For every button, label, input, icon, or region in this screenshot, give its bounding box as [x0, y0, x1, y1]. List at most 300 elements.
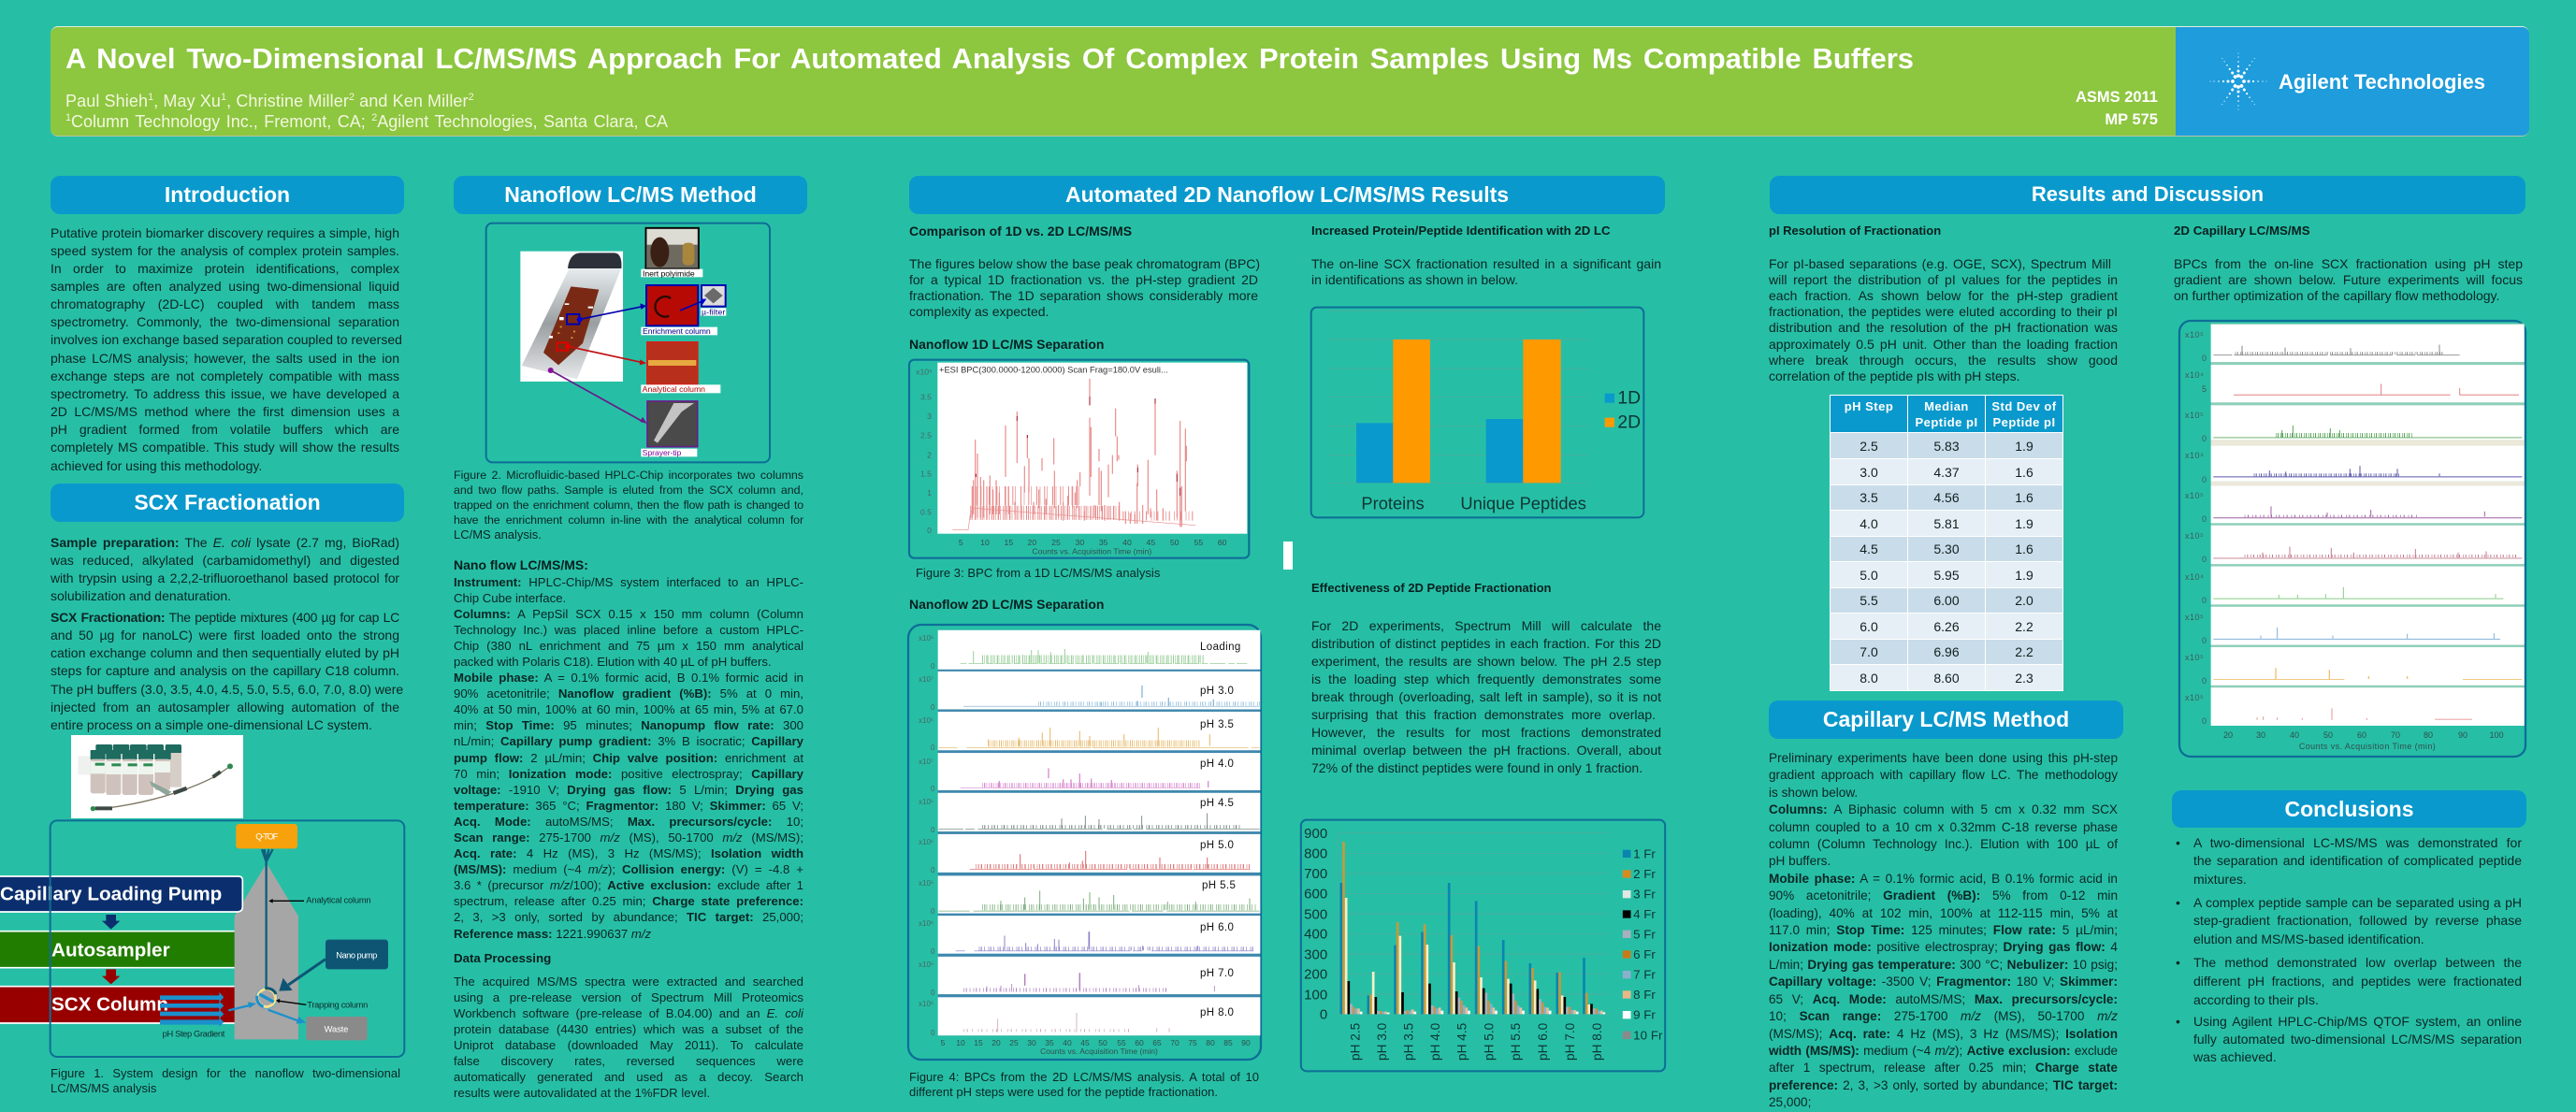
text: nano flow method: Instrument: HPLC-Chip/MS system interfaced to an HPLC-: [454, 574, 803, 589]
y axis labels: 0: [931, 989, 935, 997]
y axis labels: 400: [1304, 927, 1327, 943]
y axis labels: x10⁷: [919, 758, 933, 766]
legend: 5 Fr: [1633, 927, 1656, 941]
text: data processing: Workbench software (pre-release of B.04.00) and an E. coli: [454, 1006, 803, 1020]
y axis labels: 0.5: [920, 507, 932, 516]
x axis labels: pH 5.0: [1482, 1022, 1497, 1061]
heading: Automated 2D Nanoflow LC/MS/MS Results: Automated 2D Nanoflow LC/MS/MS Results: [1065, 182, 1509, 207]
table: pH step vs median peptide pI: 4.0: [1860, 516, 1878, 531]
y axis labels: 0: [931, 826, 935, 834]
text: effectiveness: 72% of the distinct peptides were found in only 1 fraction.: [1311, 760, 1643, 775]
x axis labels: [1349, 1022, 1604, 1061]
fraction labels: pH 4.5: [1200, 798, 1234, 809]
photo: enrichment column: [641, 285, 717, 336]
table: pH step vs median peptide pI: 8.60: [1933, 670, 1960, 685]
text: capillary method: (MS/MS); Acq. rate: 4 Hz (MS), 3 Hz (MS/MS); Isolation: [1769, 1027, 2118, 1040]
text: capillary method: width (MS/MS): medium (~4 m/z); Active exclusion: exclude: [1769, 1044, 2118, 1058]
x axis labels: 20: [2223, 730, 2233, 740]
x axis labels: 40: [1122, 538, 1132, 547]
table: pH step vs median peptide pI: [1830, 395, 2063, 691]
category labels: Proteins: [1361, 494, 1425, 513]
figure 2: HPLC-Chip: [485, 223, 771, 464]
y axis labels: x10⁵: [2185, 613, 2204, 622]
text: capillary method: (loading), 40% at 102 min, 100% at 112-115 min, 5% at: [1769, 906, 2118, 920]
x axis labels: 60: [1135, 1038, 1144, 1047]
heading: nanoflow 2D separation: Nanoflow 2D LC/MS Separation: [909, 597, 1104, 612]
fraction labels: Loading: [1200, 642, 1241, 653]
heading: comparison of 1D vs 2D: Comparison of 1D vs. 2D LC/MS/MS: [909, 224, 1132, 238]
y axis labels: 0: [2202, 676, 2207, 686]
conclusion bullet 4: •: [2176, 1014, 2180, 1029]
x axis labels: 65: [1152, 1038, 1162, 1047]
x axis labels: 85: [1223, 1038, 1233, 1047]
x axis labels: 60: [2357, 730, 2366, 740]
photo: SCX cartridges and column: [71, 735, 243, 818]
x axis labels: pH 4.0: [1428, 1022, 1442, 1061]
table: pH step vs median peptide pI: Std Dev of: [1991, 399, 2057, 413]
photo: µ-filter: µ-filter: [702, 307, 725, 316]
text: capillary method: gradient approach with capillary flow LC. The methodology: [1769, 768, 2118, 782]
conclusion bullet 1: A two-dimensional LC-MS/MS was demonstrated for: [2193, 835, 2522, 850]
caption: figure 1: LC/MS/MS analysis: [51, 1081, 156, 1095]
conference and poster number: MP 575: [2105, 111, 2158, 128]
table: pH step vs median peptide pI: 1.9: [2015, 438, 2033, 453]
table: pH step vs median peptide pI: pH Step: [1845, 399, 1893, 413]
heading: increased identification: Increased Protein/Peptide Identification with 2D LC: [1311, 224, 1610, 238]
fraction labels: pH 5.0: [1200, 840, 1234, 851]
y axis labels: 2: [927, 450, 932, 459]
text: nano flow method: 70 min; Ionization mode: positive electrospray; Capillary: [454, 767, 803, 781]
y axis labels: 5: [2202, 384, 2207, 394]
x axis labels: pH 3.0: [1375, 1022, 1389, 1061]
label: analytical column: Analytical column: [306, 896, 371, 905]
heading: Results and Discussion: [1770, 176, 2525, 214]
flow arrows to valve and waste: [228, 1005, 297, 1020]
x axis labels: 35: [1099, 538, 1108, 547]
legend: 1 Fr: [1633, 846, 1656, 860]
x axis labels: pH 7.0: [1563, 1022, 1577, 1061]
x axis labels: pH 2.5: [1349, 1022, 1362, 1061]
heading: SCX Fractionation: [51, 484, 404, 522]
text: capillary method: 117.0 min; Stop Time: 125 minutes; Flow rate: 5 µL/min;: [1769, 923, 2118, 937]
icon: Agilent spark logo: [2209, 52, 2267, 110]
x axis labels: Counts vs. Acquisition Time (min): [1040, 1047, 1158, 1056]
table: pH step vs median peptide pI: 2.3: [2015, 670, 2033, 685]
legend: 3 Fr: [1633, 888, 1656, 902]
y axis labels: 0: [2202, 434, 2207, 443]
text: nano flow method: Scan range: 275-1700 m/z (MS), 50-1700 m/z (MS/MS);: [454, 830, 803, 845]
fraction labels: pH 3.5: [1200, 719, 1234, 730]
caption: figure 1: [51, 1066, 400, 1095]
y axis labels: [1304, 826, 1327, 1023]
table: pH step vs median peptide pI: 1.6: [2015, 464, 2033, 479]
table: pH step vs median peptide pI: 2.5: [1860, 438, 1878, 453]
y axis labels: 700: [1304, 866, 1327, 882]
text: introduction: 2D LC/MS/MS method where the first dimension uses a: [51, 404, 399, 419]
table: pH step vs median peptide pI: 5.95: [1933, 567, 1960, 582]
pH step gradient arrows: [160, 992, 224, 1027]
y axis labels: x10⁵: [2185, 491, 2204, 500]
text: SCX sample preparation: Sample preparation: The E. coli lysate (2.7 mg, BioRad): [51, 535, 399, 550]
text: comparison: for a typical 1D fractionation vs. the pH-step gradient 2D: [909, 272, 1258, 287]
conclusion bullet 4: fully automated two-dimensional LC/MS/MS separation: [2193, 1032, 2522, 1047]
conclusion bullet 1: the separation and identification of complicated peptide: [2193, 853, 2522, 868]
text: SCX fractionation: steps for capture and analysis on the capillary C18 column.: [51, 663, 399, 678]
legend: 2D: [1617, 413, 1641, 433]
header banner: [51, 26, 2529, 137]
analytical column with spray fan: [262, 849, 273, 988]
table: pH step vs median peptide pI: 6.26: [1933, 619, 1960, 634]
conclusion bullet 3: different pH fractions, and peptides were fractionated: [2193, 974, 2522, 989]
table: pH step vs median peptide pI: 4.56: [1933, 490, 1960, 505]
text: data processing: [454, 975, 804, 1100]
plot area: [937, 363, 1247, 534]
photo: enrichment column: Enrichment column: [643, 326, 711, 336]
text: pI resolution: fractionation, the peptides were eluted according to their pI: [1769, 304, 2118, 319]
y axis labels: x10⁴: [2185, 572, 2204, 582]
conclusion bullet 3: according to their pIs.: [2193, 992, 2319, 1007]
text: nano flow method: (MS/MS): medium (~4 m/z); Collision energy: (V) = -4.8 +: [454, 862, 803, 876]
x axis labels: 15: [1005, 538, 1013, 547]
text: pI resolution: correlation of the peptide pIs with pH steps.: [1769, 368, 2019, 383]
autosampler box: [0, 931, 235, 968]
text: data processing: Uniprot database (downloaded May 2011). To calculate: [454, 1038, 803, 1052]
capillary loading pump box: [0, 876, 242, 912]
heading: Conclusions: [2172, 790, 2526, 828]
x axis labels: [941, 1038, 1251, 1056]
text: nano flow method: nL/min; Capillary pump gradient: 3% B isocratic; Capillary: [454, 734, 803, 748]
legend: 8 Fr: [1633, 988, 1656, 1002]
text: capillary method: is shown below.: [1769, 786, 1858, 800]
legend: 9 Fr: [1633, 1008, 1656, 1022]
y axis labels: 300: [1304, 946, 1327, 962]
text: introduction: [51, 224, 402, 473]
fraction labels: pH 7.0: [1200, 968, 1234, 979]
table: pH step vs median peptide pI: Median: [1924, 399, 1969, 413]
text: effectiveness: break through (overloading, salt left in sample), so it is not: [1311, 689, 1661, 704]
category labels: [1361, 494, 1586, 513]
text: introduction: phase LC/MS analysis; however, the salts used in the ion: [51, 351, 399, 366]
caption: figure 1: Figure 1. System design for the nanoflow two-dimensional: [51, 1066, 400, 1080]
heading: Automated 2D Nanoflow LC/MS/MS Results: [909, 176, 1665, 214]
x axis labels: 5: [959, 538, 963, 547]
text: capillary method: column coupled to a 10 cm x 0.32mm C-18 reverse phase: [1769, 820, 2118, 834]
x axis labels: 25: [1009, 1038, 1019, 1047]
table: pH step vs median peptide pI: Peptide pI: [1915, 415, 1978, 429]
text: 2D capillary: gradient are shown below. Future experiments will focus: [2174, 272, 2523, 287]
authors and affiliations: Paul Shieh1, May Xu1, Christine Miller2 and Ken Miller2: [65, 92, 474, 110]
x axis labels: Counts vs. Acquisition Time (min): [1032, 547, 1151, 556]
x axis labels: 20: [991, 1038, 1001, 1047]
heading: Conclusions: Conclusions: [2284, 797, 2413, 821]
conclusion bullet 4: [2176, 1014, 2522, 1064]
x axis labels: 35: [1045, 1038, 1054, 1047]
table: pH step vs median peptide pI: 1.6: [2015, 490, 2033, 505]
text: nano flow method: Chip Cube interface.: [454, 591, 566, 605]
x axis labels: 80: [1206, 1038, 1215, 1047]
heading: nanoflow 1D separation: Nanoflow 1D LC/MS Separation: [909, 337, 1104, 352]
text: increased identification: The on-line SCX fractionation resulted in a significant gain: [1311, 256, 1661, 271]
text: effectiveness: is the loading step which frequently demonstrates some: [1311, 672, 1661, 686]
text: 2D capillary: [2174, 256, 2523, 303]
heading: Introduction: Introduction: [165, 182, 290, 207]
text: comparison: complexity as expected.: [909, 304, 1049, 319]
y axis labels: x10⁵: [919, 798, 933, 806]
y axis labels: x10⁶: [919, 919, 933, 928]
caption: figure 2: have the enrichment column in-line with the analytical column for: [454, 513, 803, 527]
table: pH step vs median peptide pI: 3.5: [1860, 490, 1878, 505]
waste box: Waste: [325, 1024, 348, 1033]
table: pH step vs median peptide pI: 1.9: [2015, 567, 2033, 582]
x axis labels: 70: [1170, 1038, 1179, 1047]
x axis labels: 45: [1147, 538, 1155, 547]
text: capillary method: L/min; Drying gas temperature: 300 °C; Nebulizer: 10 psig;: [1769, 958, 2118, 972]
conclusion bullet 1: •: [2176, 835, 2180, 850]
text: 2D capillary: on further optimization of the capillary flow methodology.: [2174, 288, 2499, 303]
bar series: [1341, 842, 1604, 1014]
y axis labels: 0: [2202, 514, 2207, 524]
stacked traces: [2211, 324, 2525, 726]
text: pI resolution: approximately 0.5 pH unit. Other than the loading fraction: [1769, 337, 2118, 352]
chip body: [235, 863, 298, 1039]
y axis labels: x10⁷: [919, 675, 933, 684]
text: introduction: involves ion exchange based separation coupled to reversed: [51, 332, 402, 347]
y axis labels: [919, 634, 935, 1037]
text: SCX fractionation: The pH buffers (3.0, 3.5, 4.0, 4.5, 5.0, 5.5, 6.0, 7.0, 8.0) were: [51, 682, 403, 697]
text: data processing: false discovery rates, reversed sequences were: [454, 1054, 803, 1068]
bar chart: proteins and peptides, 1D vs 2D: [1310, 307, 1644, 518]
stacked plot traces: [938, 630, 1260, 1035]
caption: figure 2: [454, 469, 803, 542]
y axis labels: 0: [931, 907, 935, 916]
y axis labels: 1: [927, 488, 932, 498]
photo: inert polyimide: [641, 228, 702, 278]
text: capillary method: Preliminary experiments have been done using this pH-step: [1769, 751, 2118, 765]
text: nano flow method: 90% acetonitrile; Nanoflow gradient (%B): 5% at 0 min,: [454, 686, 803, 700]
chromatogram trace: [952, 379, 1195, 530]
text: introduction: completely MS compatible. This study will show the results: [51, 440, 399, 455]
legend: [1623, 846, 1663, 1042]
table: pH step vs median peptide pI: 1.6: [2015, 542, 2033, 556]
y axis labels: x10⁵: [2185, 531, 2204, 541]
SCX column box: [0, 987, 235, 1023]
y axis labels: 0: [931, 703, 935, 712]
text: capillary method: pH buffers.: [1769, 854, 1831, 868]
y axis labels: 1.5: [920, 469, 932, 478]
y axis labels: 0: [931, 947, 935, 956]
x axis labels: 50: [2323, 730, 2333, 740]
text: capillary method: 25,000;: [1769, 1095, 1811, 1109]
conclusion bullet 2: step-gradient fractionation, followed by reverse phase: [2193, 913, 2522, 928]
y axis labels: 600: [1304, 887, 1327, 903]
heading: 2D capillary: 2D Capillary LC/MS/MS: [2174, 224, 2310, 238]
x axis labels: 50: [1170, 538, 1179, 547]
text: nano flow method: voltage: -1910 V; Drying gas flow: 5 L/min; Drying gas: [454, 783, 803, 797]
x axis labels: 55: [1117, 1038, 1126, 1047]
conclusion bullet 1: [2176, 835, 2522, 887]
x axis labels: 40: [1063, 1038, 1072, 1047]
y axis labels: 900: [1304, 826, 1327, 842]
figure 4: 2D base peak chromatograms: [907, 623, 1263, 1061]
table: pH step vs median peptide pI: 4.5: [1860, 542, 1878, 556]
y axis labels: x10⁵: [919, 634, 933, 643]
text: SCX fractionation: cation exchange column and then sequentially eluted by pH: [51, 645, 399, 660]
text: capillary method: [1769, 751, 2118, 1109]
y axis labels: 3.5: [920, 392, 932, 401]
text: nano flow method: 2, 3, >3 only, sorted by abundance; TIC target: 25,000;: [454, 910, 803, 924]
photo: sprayer tip: Sprayer-tip: [643, 448, 682, 457]
conclusion bullet 2: [2176, 895, 2522, 946]
text: effectiveness: distribution of distinct peptides in each fraction. For this 2D: [1311, 636, 1661, 651]
text: increased identification: in identifications as shown in below.: [1311, 272, 1518, 287]
y axis labels: 0: [2202, 636, 2207, 645]
text: SCX fractionation: entire process on a simple one-dimensional LC system.: [51, 717, 372, 732]
y axis labels: 0: [1320, 1007, 1327, 1023]
text: effectiveness: experiment, the results are shown below. The pH 2.5 step: [1311, 654, 1661, 669]
heading: Data Processing: Data Processing: [454, 951, 551, 965]
y axis labels: 0: [2202, 354, 2207, 363]
y axis labels: x10⁵: [916, 367, 933, 376]
dark peak tips: [976, 397, 1180, 496]
x axis labels: 30: [1027, 1038, 1036, 1047]
y axis labels: x10⁴: [2185, 451, 2204, 460]
legend: 2 Fr: [1633, 867, 1656, 881]
y axis labels: x10⁶: [919, 838, 933, 846]
bars: unique peptides: [1486, 339, 1561, 483]
conclusion bullet 4: Using Agilent HPLC-Chip/MS QTOF system, an online: [2193, 1014, 2522, 1029]
y axis labels: 2.5: [920, 431, 932, 440]
x axis labels: 100: [2489, 730, 2504, 740]
x axis labels: 45: [1080, 1038, 1090, 1047]
heading: Capillary LC/MS Method: [1769, 700, 2123, 739]
caption: figure 2: LC/MS analysis.: [454, 527, 542, 542]
y axis labels: 100: [1304, 987, 1327, 1003]
x axis labels: 30: [1076, 538, 1084, 547]
Q-TOF box: Q-TOF: [255, 832, 279, 842]
x axis labels: 70: [2391, 730, 2400, 740]
photo: analytical column: [641, 342, 720, 394]
bars: proteins: [1356, 339, 1430, 483]
text: nano flow method: Acq. rate: 4 Hz (MS), 3 Hz (MS/MS); Isolation width: [454, 846, 803, 860]
text: introduction: pH gradient formed from volatile buffers which are: [51, 422, 399, 437]
fraction labels: pH 8.0: [1200, 1007, 1234, 1018]
conference and poster number: [2076, 89, 2158, 128]
white marker block: [1283, 542, 1293, 570]
conclusion bullet 2: •: [2176, 895, 2180, 910]
table: pH step vs median peptide pI: 6.96: [1933, 644, 1960, 659]
text: pI resolution: each fraction. As shown below for the pH-step gradient: [1769, 288, 2118, 303]
x axis labels: 20: [1028, 538, 1036, 547]
text: introduction: achieved for using this methodology.: [51, 458, 262, 473]
nano pump box with arrow: Nano pump: [336, 950, 377, 960]
legend: 1D: [1617, 389, 1641, 409]
logo panel background: [2176, 27, 2529, 137]
table: pH step vs median peptide pI: 2.0: [2015, 593, 2033, 608]
x axis labels: 90: [1241, 1038, 1251, 1047]
y axis labels: x10⁵: [2185, 411, 2204, 420]
text: capillary method: 65 V; Acq. Mode: autoMS/MS; Max. precursors/cycle:: [1769, 992, 2118, 1006]
y axis labels: x10⁵: [919, 879, 933, 888]
y axis labels: 0: [2202, 475, 2207, 484]
caption: figure 4: different pH steps were used for the peptide fractionation.: [909, 1085, 1218, 1099]
text: capillary method: column (Column Technology Inc.). Elution with 100 µL of: [1769, 837, 2118, 851]
table: pH step vs median peptide pI: 5.0: [1860, 567, 1878, 582]
text: SCX sample preparation: was reduced, alkylated (carbamidomethyl) and digested: [51, 553, 399, 568]
figure 1: system diagram: [0, 819, 406, 1058]
photo: analytical column: Analytical column: [643, 384, 705, 394]
text: capillary method: 90% acetonitrile; Gradient (%B): 5% from 0-12 min: [1769, 888, 2118, 903]
text: effectiveness: minimal overlap between the pH fractions. Overall, about: [1311, 743, 1661, 758]
heading: Introduction: [51, 176, 404, 214]
text: nano flow method: spectrum, release after 0.25 min; Charge state preference:: [454, 894, 803, 908]
scan header: +ESI BPC(300.0000-1200.0000) Scan Frag=180.0V esuli...: [939, 366, 1168, 375]
conclusion bullet 3: •: [2176, 955, 2180, 970]
y axis labels: 0: [927, 526, 932, 535]
x axis labels: 5: [941, 1038, 946, 1047]
caption: figure 4: Figure 4: BPCs from the 2D LC/MS/MS analysis. A total of 10: [909, 1070, 1259, 1084]
autosampler box: Autosampler: [51, 939, 170, 960]
x axis labels: 60: [1218, 538, 1227, 547]
table: pH step vs median peptide pI: 5.5: [1860, 593, 1878, 608]
table: pH step vs median peptide pI: 8.0: [1860, 670, 1878, 685]
figure frame: [51, 820, 404, 1057]
y axis labels: x10⁵: [2185, 653, 2204, 662]
caption: figure 2: and two flow paths. Sample is eluted from the SCX column and,: [454, 484, 803, 497]
table: pH step vs median peptide pI: 5.83: [1933, 438, 1960, 453]
x axis labels: 30: [2256, 730, 2265, 740]
text: introduction: chromatography (2D-LC) coupled with tandem mass: [51, 296, 399, 311]
bar chart: peptide overlap by pH fraction: [1300, 819, 1667, 1072]
text: SCX sample preparation: solubilization and denaturation.: [51, 588, 231, 603]
text: SCX fractionation: injected from an autosampler allowing automation of the: [51, 700, 399, 715]
y axis labels: 200: [1304, 967, 1327, 983]
table: pH step vs median peptide pI: 1.9: [2015, 516, 2033, 531]
text: pI resolution: For pI-based separations (e.g. OGE, SCX), Spectrum Mill: [1769, 256, 2111, 271]
figure: capillary LC chromatograms: [2178, 320, 2527, 758]
table: pH step vs median peptide pI: 4.37: [1933, 464, 1960, 479]
y axis labels: [916, 367, 933, 535]
fraction labels: pH 4.0: [1200, 758, 1234, 770]
legend: 7 Fr: [1633, 968, 1656, 982]
table: pH step vs median peptide pI: 6.00: [1933, 593, 1960, 608]
text: introduction: samples are often analyzed using two-dimensional liquid: [51, 279, 399, 294]
text: SCX sample preparation: with trypsin using a 2,2,2-trifluoroethanol based protocol for: [51, 570, 399, 585]
text: introduction: speed system for the analysis of complex protein samples.: [51, 243, 399, 258]
fraction labels: pH 3.0: [1200, 686, 1234, 697]
text: introduction: Putative protein biomarker discovery requires a simple, high: [51, 224, 399, 239]
y axis labels: 800: [1304, 846, 1327, 862]
caption: figure 2: Figure 2. Microfluidic-based HPLC-Chip incorporates two columns: [454, 469, 803, 482]
legend: [1605, 389, 1641, 433]
x axis labels: pH 5.5: [1509, 1022, 1523, 1061]
heading: Capillary LC/MS Method: Capillary LC/MS Method: [1823, 707, 2069, 731]
list: conclusions: [2176, 835, 2522, 1064]
text: comparison: The figures below show the base peak chromatogram (BPC): [909, 256, 1260, 271]
y axis labels: 500: [1304, 906, 1327, 922]
heading: Results and Discussion: Results and Discussion: [2032, 182, 2264, 206]
caption: figure 3: Figure 3: BPC from a 1D LC/MS/MS analysis: [916, 566, 1160, 580]
x axis labels: 55: [1194, 538, 1203, 547]
table: pH step vs median peptide pI: Peptide pI: [1992, 415, 2056, 429]
y axis labels: x10⁴: [2185, 370, 2204, 380]
text: introduction: exchange steps are not completely compatible with mass: [51, 368, 399, 383]
table: pH step vs median peptide pI: 3.0: [1860, 464, 1878, 479]
text: nano flow method: packed with Polaris C18). Elution with 40 µL of pH buffers.: [454, 655, 772, 669]
text: nano flow method: [454, 574, 803, 941]
icon: switching valve: [256, 988, 277, 1008]
text: comparison: [909, 256, 1260, 319]
text: capillary method: Columns: A Biphasic column with 5 cm x 0.32 mm SCX: [1769, 802, 2118, 816]
